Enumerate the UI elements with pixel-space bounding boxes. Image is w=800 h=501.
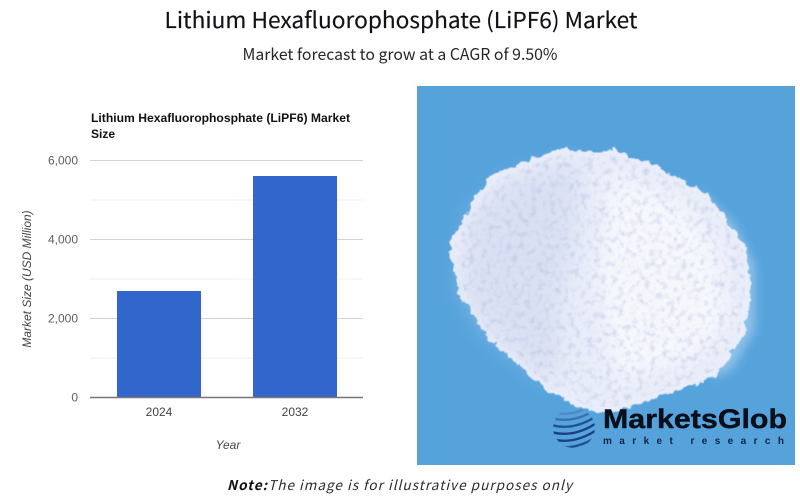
logo tagline: market research [603,436,784,447]
powder grain [455,153,745,407]
title: Lithium Hexafluorophosphate (LiPF6) Market [164,3,638,35]
note: Note:The image is for illustrative purposes only [227,474,574,494]
x axis title: Year [216,438,241,452]
y axis labels: 0 [71,390,78,404]
bright right face [604,185,722,372]
x axis labels: 2024 [146,405,173,419]
panel: powder photo [417,86,795,465]
glow behind powder [700,190,755,378]
logo [551,404,787,447]
bar: 2032 [253,176,337,398]
logo wordmark: MarketsGlob [603,404,787,434]
shaded left face [460,162,580,385]
y axis labels: 6,000 [48,154,78,168]
y axis labels: 2,000 [48,312,78,326]
y axis labels: 4,000 [48,232,78,246]
y axis labels [48,154,78,404]
chart title: Lithium Hexafluorophosphate (LiPF6) Market [91,111,350,125]
x axis labels: 2032 [282,405,309,419]
powder pile [448,148,750,412]
bar: 2024 [117,291,201,398]
subtitle: Market forecast to grow at a CAGR of 9.50% [242,41,558,65]
bar chart [20,111,363,452]
x axis labels [146,405,309,419]
icon: striped globe [553,409,595,448]
chart title: Size [91,127,115,141]
y axis title: Market Size (USD Million) [20,210,34,348]
